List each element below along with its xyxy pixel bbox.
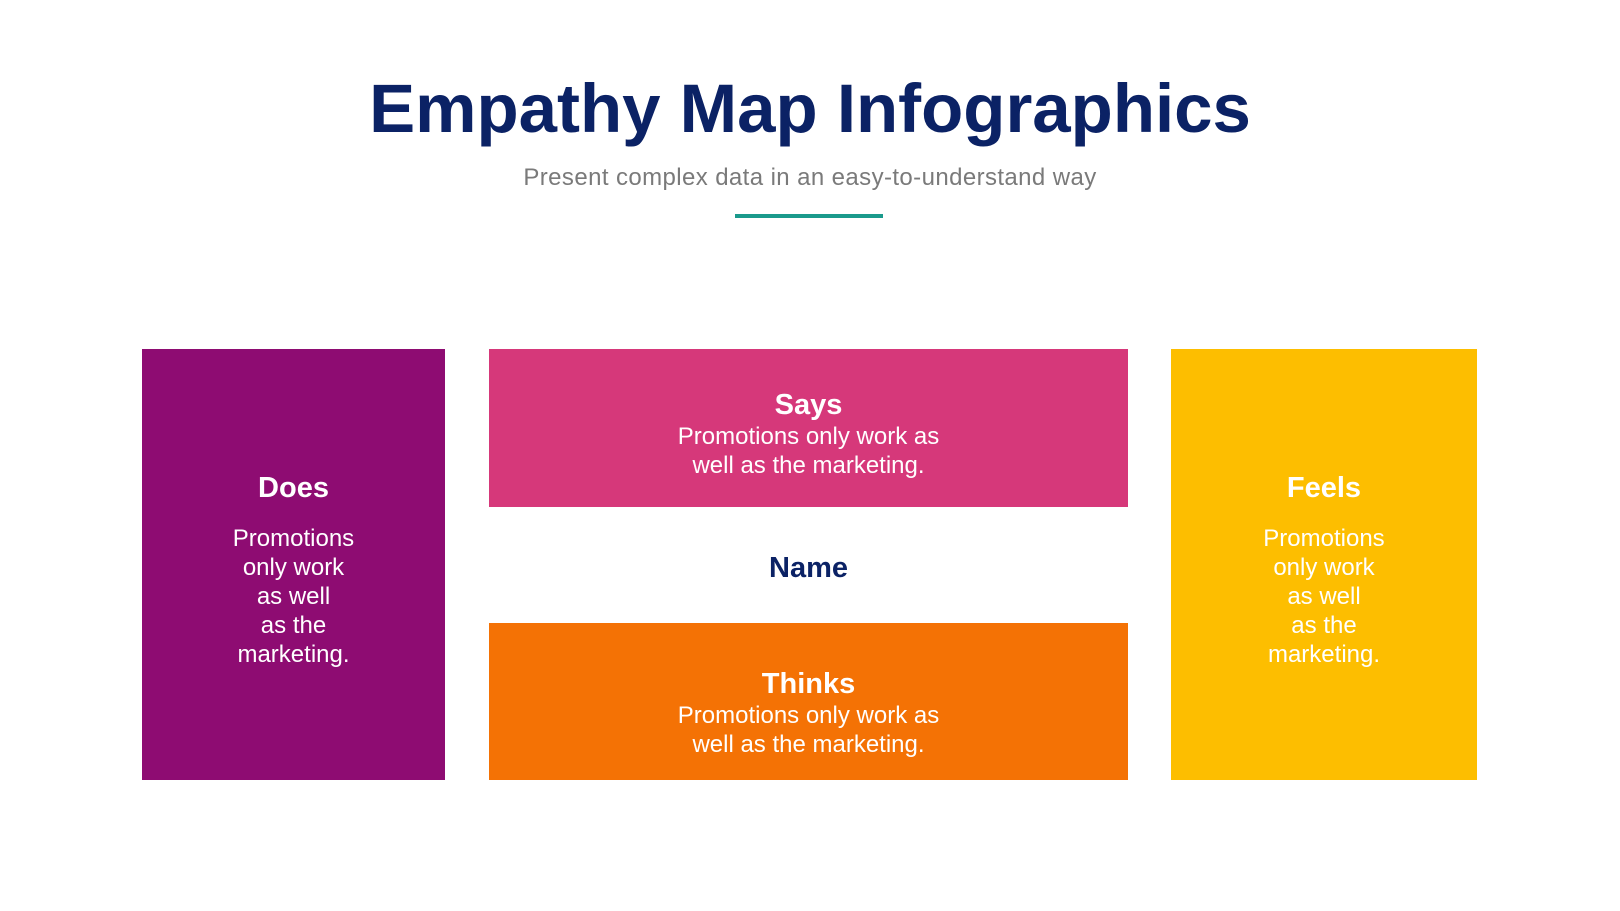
text: feels	[1263, 525, 1385, 668]
label: name: Name	[769, 552, 848, 584]
text: does: Promotions	[233, 525, 354, 552]
heading: feels: Feels	[1287, 472, 1361, 504]
text: says: well as the marketing.	[692, 452, 925, 479]
text: feels: only work	[1273, 554, 1375, 581]
text: thinks: Promotions only work as	[678, 702, 939, 729]
text: says	[678, 423, 939, 479]
text: thinks	[678, 702, 939, 758]
text: thinks: well as the marketing.	[692, 731, 925, 758]
text: does: as well	[257, 583, 330, 610]
text: feels: Promotions	[1263, 525, 1385, 552]
panel: thinks	[489, 623, 1128, 780]
text: feels: marketing.	[1268, 641, 1380, 668]
text: does: marketing.	[237, 641, 350, 668]
heading: thinks: Thinks	[762, 668, 855, 700]
accent line	[735, 214, 883, 218]
text: feels: as well	[1287, 583, 1361, 610]
text: does: as the	[261, 612, 326, 639]
text: does	[233, 525, 354, 668]
title: Empathy Map Infographics	[369, 70, 1251, 147]
text: does: only work	[243, 554, 344, 581]
panel: says	[489, 349, 1128, 507]
subtitle: Present complex data in an easy-to-understand way	[523, 164, 1097, 191]
heading: says: Says	[775, 389, 842, 421]
panel: does	[142, 349, 445, 780]
panel: feels	[1171, 349, 1477, 780]
text: feels: as the	[1291, 612, 1357, 639]
text: says: Promotions only work as	[678, 423, 939, 450]
heading: does: Does	[258, 472, 329, 504]
